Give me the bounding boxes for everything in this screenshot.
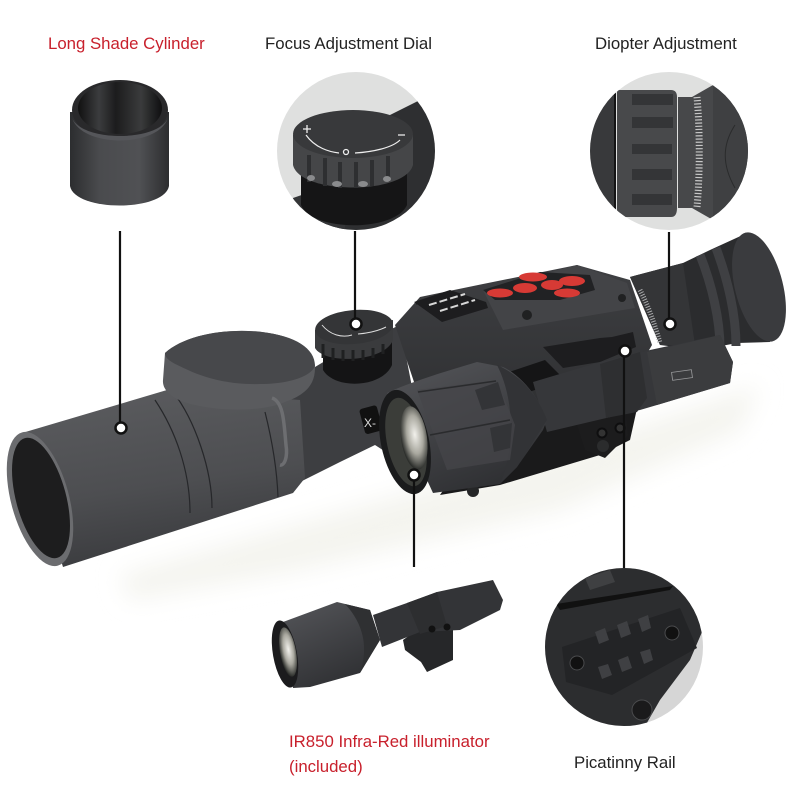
model label [359, 405, 383, 435]
knurled ring [293, 135, 413, 188]
image: IR illuminator [267, 580, 503, 690]
inset: diopter adjustment [585, 72, 752, 230]
leader line: focus dial [350, 231, 362, 330]
caption: included: (included) [289, 757, 363, 776]
inset: focus dial [277, 72, 440, 240]
leader line: diopter [664, 232, 676, 330]
model label: X- [364, 416, 376, 430]
image: shade cylinder [70, 80, 169, 206]
shade tube body [22, 390, 305, 567]
lens cap [163, 331, 315, 410]
caption: Picatinny Rail: Picatinny Rail [574, 753, 676, 772]
illuminator head [387, 362, 547, 493]
label plate [414, 290, 488, 322]
picatinny mount [543, 332, 636, 368]
illuminator lens [371, 385, 439, 499]
upper housing [395, 265, 652, 450]
dial base [301, 170, 407, 225]
neck tube [290, 325, 430, 482]
caption: IR850 illuminator: IR850 Infra-Red illuminator [289, 732, 490, 751]
focus dial [314, 307, 394, 384]
objective opening [0, 425, 86, 573]
tube seams [155, 392, 278, 513]
cap strap [272, 398, 287, 465]
underside [440, 395, 640, 495]
heading: Diopter Adjustment: Diopter Adjustment [595, 34, 737, 53]
leader line: shade cylinder [116, 231, 126, 434]
heading: Focus Adjustment Dial: Focus Adjustment Dial [265, 34, 432, 53]
leader line: illuminator [408, 470, 420, 567]
mount clamp and screws [467, 405, 628, 497]
dial markings [306, 135, 400, 153]
illuminator tube [533, 335, 733, 432]
mount [403, 628, 453, 672]
image: rifle scope [0, 227, 796, 573]
heading: Long Shade Cylinder: Long Shade Cylinder [48, 34, 205, 53]
scale ticks [697, 97, 699, 207]
control panel [483, 265, 635, 330]
inset: picatinny rail [540, 568, 705, 735]
red buttons [487, 288, 513, 298]
lens [267, 618, 303, 690]
eyepiece [630, 227, 796, 350]
tube [373, 580, 503, 647]
shadow under scope [120, 385, 760, 600]
head [283, 602, 380, 688]
leader line: picatinny [620, 346, 630, 568]
